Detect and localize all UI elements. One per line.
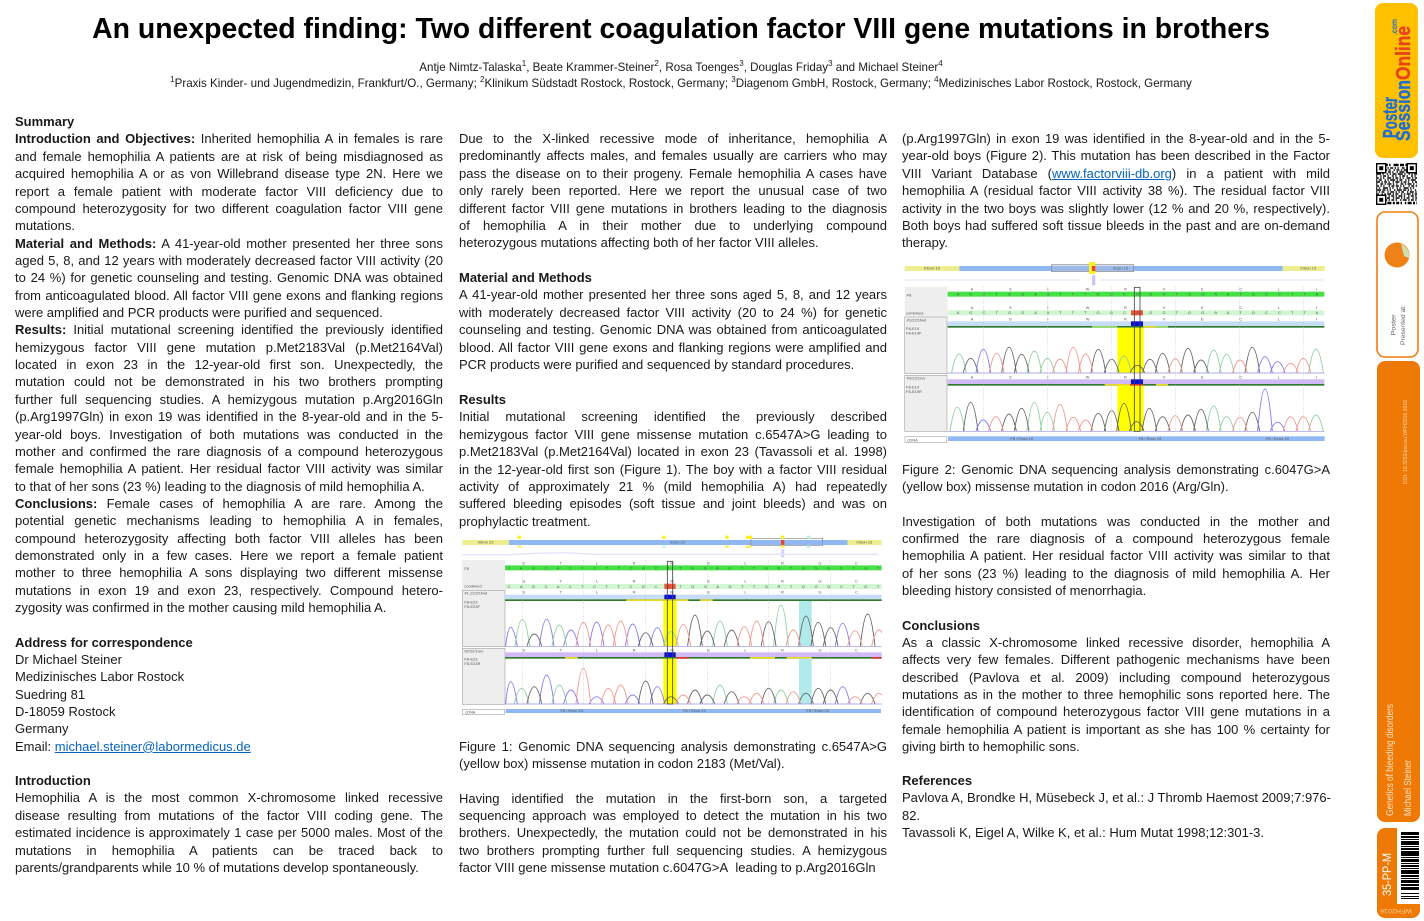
text: results continued: Both boys had suffered soft tissue bleeds in the past and are on-demand [902, 218, 1330, 233]
panel: session information [1377, 361, 1420, 822]
reference and combined rows: ASIWRVECLI [971, 287, 1317, 292]
panel: references: Pavlova A, Brondke H, Müsebeck J, et al.: J Thromb Haemost 2009;7:976- [902, 790, 1331, 805]
sequence trace 1: F8-E23 [464, 600, 478, 605]
reference and combined rows [462, 560, 882, 590]
text: mother investigation: confirmed the rare diagnosis of a compound heterozygous female [902, 531, 1330, 546]
panel: introduction: Hemophilia A is the most common X-chromosome linked recessive [15, 790, 443, 805]
sequence trace 2: #2/22/1rev [464, 648, 483, 653]
panel: conclusions: female hemophilia A patient is important as she has 100 % certainty for [902, 722, 1330, 737]
reference and combined rows: ASIWRVECLI [971, 305, 1317, 310]
panel: conclusions: identification of compound heterozygous factor VIII gene mutations in a [902, 704, 1330, 719]
panel: summary: year-old boys. Investigation of both mutations was conducted in the [15, 427, 443, 442]
text: results continued: VIII Variant Database (www.factorviii-db.org) in a patient with mild [902, 166, 1330, 181]
exon track: Intron 22 [478, 540, 494, 545]
text: inheritance background: predominantly affects males, and females usually are carriers who may [459, 148, 887, 163]
position axis: F8 / Exon 19 [1010, 436, 1034, 441]
reference and combined rows: combined [906, 310, 923, 315]
logo: PosterSessionOnline: .com [1390, 19, 1399, 35]
panel: conclusions: mutations as in the mother to three hemophilic sons reported here. The [902, 687, 1330, 702]
position axis [905, 287, 1325, 443]
panel: address for correspondence: Suedring 81 [15, 687, 85, 702]
chart: figure 2 DNA sequencing chromatogram [904, 262, 1325, 443]
position axis [462, 560, 881, 715]
panel: conclusions: As a classic X-chromosome linked recessive disorder, hemophilia A [902, 635, 1330, 650]
text: results continued: therapy. [902, 235, 948, 250]
position axis: F8 / Exon 23 [806, 708, 830, 713]
text: inheritance background: pass the disease on to their progeny. Female hemophilia A cases have [459, 166, 887, 181]
reference and combined rows: combined [464, 584, 482, 589]
panel: conclusions [902, 618, 1330, 754]
panel: summary: (p.Arg1997Gln) in exon 19 was identified in the 8-year-old and in the 5- [15, 409, 443, 424]
panel: summary: to that of her sons (23 %) leading to the diagnosis of mild hemophilia A. [15, 479, 425, 494]
panel: material and methods: A 41-year-old mother presented her three sons aged 5, 8, and 12 years [459, 287, 887, 302]
sidebar [1375, 3, 1420, 918]
panel: material and methods [459, 270, 887, 372]
panel: references: Tavassoli K, Eigel A, Wilke K, et al.: Hum Mutat 1998;12:301-3. [902, 825, 1264, 840]
exon track [462, 536, 882, 557]
caption: figure 2 [902, 462, 1330, 494]
logo: PosterSessionOnline [1375, 3, 1418, 158]
panel: summary: zygosity was confirmed in the mother causing mild hemophilia A. [15, 600, 386, 615]
sequence trace 1: #1/22/1fwd [907, 317, 926, 322]
panel: material and methods: PCR products were purified and sequenced by standard procedures. [459, 357, 854, 372]
panel: conclusions: affects very few females. Different pathogenic mechanisms have been [902, 652, 1330, 667]
sequence trace 2: F8-E23R [464, 661, 480, 666]
panel: material and methods: with moderately decreased factor VIII activity (20 to 24 %) for genetic [459, 305, 887, 320]
panel: summary: compound heterozygosity for two different coagulation factor VIII gene [15, 201, 443, 216]
sequence trace 2: #2/22/1rev [907, 375, 926, 380]
reference and combined rows: C A G C A C T C T T C G C R T G G A G T T G R T G G G C T G T [508, 584, 880, 589]
sequence trace 1 [462, 590, 886, 647]
panel: summary: located in exon 23 in the 12-year-old first son. Unexpectedly, the [15, 357, 443, 372]
panel: material and methods: blood. All factor VIII gene exons and flanking regions were amplified and [459, 340, 887, 355]
exon track: Exon 23 [670, 540, 686, 545]
panel: summary: mutation could not be demonstrated in his two brothers prompting [15, 374, 443, 389]
text: targeted sequencing: sequencing approach was employed to detect the mutation in his two [459, 808, 887, 823]
panel: introduction: Introduction [15, 773, 91, 788]
panel: summary: hemizygous factor VIII gene mutation p.Met2183Val (p.Met2164Val) [15, 340, 443, 355]
panel: introduction: mutations in hemophilia A patients can be traced back to [15, 843, 443, 858]
panel: references [902, 773, 1331, 840]
reference and combined rows [905, 287, 1324, 317]
panel: presented at: Presented at: [1400, 305, 1407, 345]
panel: summary: Material and Methods: A 41-year-old mother presented her three sons [15, 236, 443, 251]
exon track: Exon 19 [1113, 266, 1129, 271]
position axis: F8 / Exon 23 [683, 708, 706, 713]
text: results continued: activity in the two boys was slightly lower (12 % and 20 %, respectively). [902, 201, 1330, 216]
sequence trace 1: F8-E19 [906, 326, 920, 331]
text: mother investigation: Investigation of both mutations was conducted in the mother and [902, 514, 1330, 529]
exon track: Intron 18 [924, 266, 941, 271]
text: inheritance background: Due to the X-linked recessive mode of inheritance, hemophilia A [459, 131, 887, 146]
panel: summary: from anticoagulated blood. All factor VIII gene exons and flanking regions [15, 288, 443, 303]
text: inheritance background: only rarely been reported. Here we report the unusual case of two [459, 183, 887, 198]
panel: address for correspondence: Email: michael.steiner@labormedicus.de [15, 739, 251, 754]
panel: presented at: Poster [1390, 314, 1398, 335]
panel: results: p.Met2183Val (p.Met2164Val) located in exon 23 (Tavassoli et al. 1998) [459, 444, 887, 459]
text: inheritance background [459, 131, 887, 250]
panel: address for correspondence [15, 635, 251, 754]
logo: PosterSessionOnline: Poster [1380, 97, 1402, 138]
panel: summary: to 24 %) for genetic counseling and testing. Genomic DNA was obtained [15, 270, 443, 285]
panel: material and methods: counseling and testing. Genomic DNA was obtained from anticoagulated [459, 322, 887, 337]
text: targeted sequencing: two brothers prompting further full sequencing studies. A hemizygous [459, 843, 887, 858]
panel: summary: mutations. [15, 218, 75, 233]
panel: summary [15, 114, 443, 615]
panel: summary: were amplified and PCR products were purified and sequenced. [15, 305, 383, 320]
panel: poster number and barcode: WFH2016 [1379, 907, 1412, 913]
panel: summary: Summary [15, 114, 74, 129]
text: mother investigation: of her sons (23 %) leading to the diagnosis of mild hemophilia A. Her [902, 566, 1330, 581]
panel: summary: report a female patient with moderate factor VIII deficiency due to [15, 184, 443, 199]
chart: figure 1 DNA sequencing chromatogram [462, 536, 882, 715]
panel: summary: compound heterozygosity affecting both factor VIII alleles has been [15, 531, 443, 546]
panel: results: Results [459, 392, 506, 407]
panel: summary: mother to three hemophilia A sons displaying two different missense [15, 565, 443, 580]
text: mother investigation: hemophilia A patient. Her residual factor VIII activity was similar to that [902, 548, 1330, 563]
panel: summary: mutations in exon 19 and exon 23, respectively. Compound hetero- [15, 583, 443, 598]
sequence trace 2: ASIWRVECLI [971, 374, 1317, 379]
reference and combined rows: A G C T G G A A T T T G G C R G G T G G A A T G C C T T A [957, 310, 1319, 315]
panel: address for correspondence: Address for correspondence [15, 635, 193, 650]
text: inheritance background: heterozygous mutations affecting both of her factor VIII alleles. [459, 235, 819, 250]
caption: figure 1: Figure 1: Genomic DNA sequencing analysis demonstrating c.6547A>G [459, 739, 887, 754]
panel: references: References [902, 773, 972, 788]
exon track: Intron 19 [1300, 266, 1317, 271]
panel: results: suffered bleeding episodes (soft tissue and joint bleeds) and was on [459, 496, 887, 511]
panel: summary: Results: Initial mutational screening identified the previously identified [15, 322, 443, 337]
caption: figure 2: Figure 2: Genomic DNA sequencing analysis demonstrating c.6047G>A [902, 462, 1330, 477]
text: inheritance background: different factor VIII gene mutations in brothers leading to the diagnosis [459, 201, 887, 216]
panel: material and methods: Material and Methods [459, 270, 592, 285]
caption: figure 2: (yellow box) missense mutation in codon 2016 (Arg/Gln). [902, 479, 1229, 494]
text: results continued: hemophilia A (residual factor VIII activity 38 %). The residual factor VIII [902, 183, 1330, 198]
panel: poster number and barcode: 35-PP-M [1380, 853, 1394, 896]
sequence trace 1: ASIWRVECLI [971, 316, 1317, 321]
reference and combined rows: F8 [464, 566, 470, 571]
panel: address for correspondence: Germany [15, 721, 68, 736]
exon track [905, 262, 1325, 285]
position axis: cDNA [907, 437, 918, 442]
text: inheritance background: of hemophilia A in their mother due to underlying compound [459, 218, 887, 233]
panel: results: prophylactic treatment. [459, 514, 591, 529]
panel: summary: Introduction and Objectives: Inherited hemophilia A in females is rare [15, 131, 443, 146]
position axis: F8 / Exon 19 [1139, 436, 1162, 441]
mutation marker [1134, 287, 1140, 431]
text: targeted sequencing: factor VIII gene missense mutation c.6047G>A leading to p.Arg2016Gln [459, 860, 876, 875]
sequence trace 2: F8-E19R [906, 389, 922, 394]
panel: presented at [1377, 212, 1418, 357]
panel: summary: further full sequencing studies. A hemizygous mutation p.Arg2016Gln [15, 392, 443, 407]
sequence trace 2: F8-E19 [906, 384, 920, 389]
panel: summary: demonstrated only in a few cases. Here we report a female patient [15, 548, 443, 563]
text: targeted sequencing [459, 791, 887, 875]
sequence trace 2: F8-E23 [464, 657, 478, 662]
text: results continued: year-old boys (Figure 2). This mutation has been described in the Factor [902, 148, 1330, 163]
panel: references: 82. [902, 808, 920, 823]
panel: conclusions: giving birth to hemophilic sons. [902, 739, 1080, 754]
text: targeted sequencing: Having identified the mutation in the first-born son, a targeted [459, 791, 887, 806]
position axis: F8 / Exon 19 [1266, 436, 1289, 441]
exon track: Intron 23 [856, 540, 873, 545]
panel: session information: DOI: 10.3252/pso.eu.WFH2016.2016 [1403, 400, 1409, 484]
sequence trace 2 [905, 374, 1324, 431]
sequence trace 1 [905, 316, 1324, 374]
reference and combined rows: STLRMELRGC [522, 560, 858, 565]
panel: poster number and barcode [1377, 828, 1420, 918]
sequence trace 2: STLRMELRGC [522, 647, 858, 652]
caption: figure 1: (yellow box) missense mutation in codon 2183 (Met/Val). [459, 756, 785, 771]
sequence trace 1: STLRMELRGC [522, 590, 858, 595]
text: results continued: (p.Arg1997Gln) in exon 19 was identified in the 8-year-old and in the 5- [902, 131, 1330, 146]
panel: summary: mother and confirmed the rare diagnosis of a compound heterozygous [15, 444, 443, 459]
sequence trace 2 [462, 647, 886, 704]
panel: introduction: parents/grandparents while 10 % of mutations develop spontaneously. [15, 860, 419, 875]
logo: PosterSessionOnline: Online [1393, 26, 1415, 80]
panel: introduction [15, 773, 443, 875]
panel: results: Initial mutational screening identified the previously described [459, 409, 887, 424]
panel: results: in the 12-year-old first son (Figure 1). The boy with a factor VIII residual [459, 462, 887, 477]
text: mother investigation [902, 514, 1330, 598]
panel: introduction: disease resulting from mutations of the factor VIII coding gene. The [15, 808, 443, 823]
affiliations: 1Praxis Kinder- und Jugendmedizin, Frankfurt/O., Germany; 2Klinikum Südstadt Rostock, Rostock, Germany; 3Diagenom GmbH, Rostock, Germany; 4Medizinisches Labor Rostock, Rostock, Germany [170, 75, 1192, 90]
reference and combined rows: F8 [907, 292, 912, 297]
position axis: F8 / Exon 23 [560, 708, 584, 713]
reference and combined rows: A G C T G G A A T T T G G C G G G T G G A A T G C C T T A [957, 292, 1319, 297]
reference and combined rows: C A G C A C T C T T C G C A T G G A G T T G R T G G G C T G T [508, 565, 880, 570]
panel: session information: Genetics of bleeding disorders [1384, 704, 1396, 816]
authors: Antje Nimtz-Talaska1, Beate Krammer-Steiner2, Rosa Toenges3, Douglas Friday3 and Michael Steiner4 [419, 59, 943, 74]
panel: address for correspondence: Dr Michael Steiner [15, 652, 122, 667]
panel: results [459, 392, 887, 529]
panel: summary: acquired hemophilia A or as von Willebrand disease type 2N. Here we [15, 166, 443, 181]
text: mother investigation: bleeding history consisted of menorrhagia. [902, 583, 1146, 598]
panel: introduction: estimated incidence is approximately 1 case per 5000 males. Most of the [15, 825, 443, 840]
reference and combined rows: STLRMELRGC [522, 579, 858, 584]
panel: summary: aged 5, 8, and 12 years with moderately decreased factor VIII activity (20 [15, 253, 443, 268]
panel: address for correspondence: Medizinisches Labor Rostock [15, 669, 184, 684]
text: results continued [902, 131, 1330, 250]
panel: summary: female hemophilia A patient. Her residual factor VIII activity was similar [15, 461, 443, 476]
logo: PosterSessionOnline: Session [1393, 80, 1415, 141]
panel: session information: Michael Steiner [1402, 760, 1414, 816]
panel: summary: and female hemophilia A patients are at risk of being misdiagnosed as [15, 149, 443, 164]
position axis: cDNA [465, 709, 476, 714]
text: targeted sequencing: brothers. Unexpectedly, the mutation could not be demonstrated in his [459, 825, 887, 840]
mutation marker [667, 561, 673, 704]
sequence trace 1: F8-E19F [906, 331, 922, 336]
sequence trace 1: #1.1/22/1fwd [464, 591, 487, 596]
title: An unexpected finding: Two different coagulation factor VIII gene mutations in brothers [92, 13, 1270, 45]
sequence trace 1: F8-E23F [464, 604, 480, 609]
panel: conclusions: Conclusions [902, 618, 980, 633]
panel: address for correspondence: D-18059 Rostock [15, 704, 115, 719]
QR code [1376, 163, 1417, 205]
panel: summary: Conclusions: Female cases of hemophilia A are rare. Among the [15, 496, 443, 511]
caption: figure 1 [459, 739, 887, 771]
panel: conclusions: described (Pavlova et al. 2009) including compound heterozygous [902, 670, 1330, 685]
panel: results: activity of approximately 21 % (mild hemophilia A) had repeatedly [459, 479, 887, 494]
panel: results: hemizygous factor VIII gene missense mutation c.6547A>G leading to [459, 427, 887, 442]
panel: summary: potential genetic mechanisms leading to hemophilia A in females, [15, 513, 443, 528]
